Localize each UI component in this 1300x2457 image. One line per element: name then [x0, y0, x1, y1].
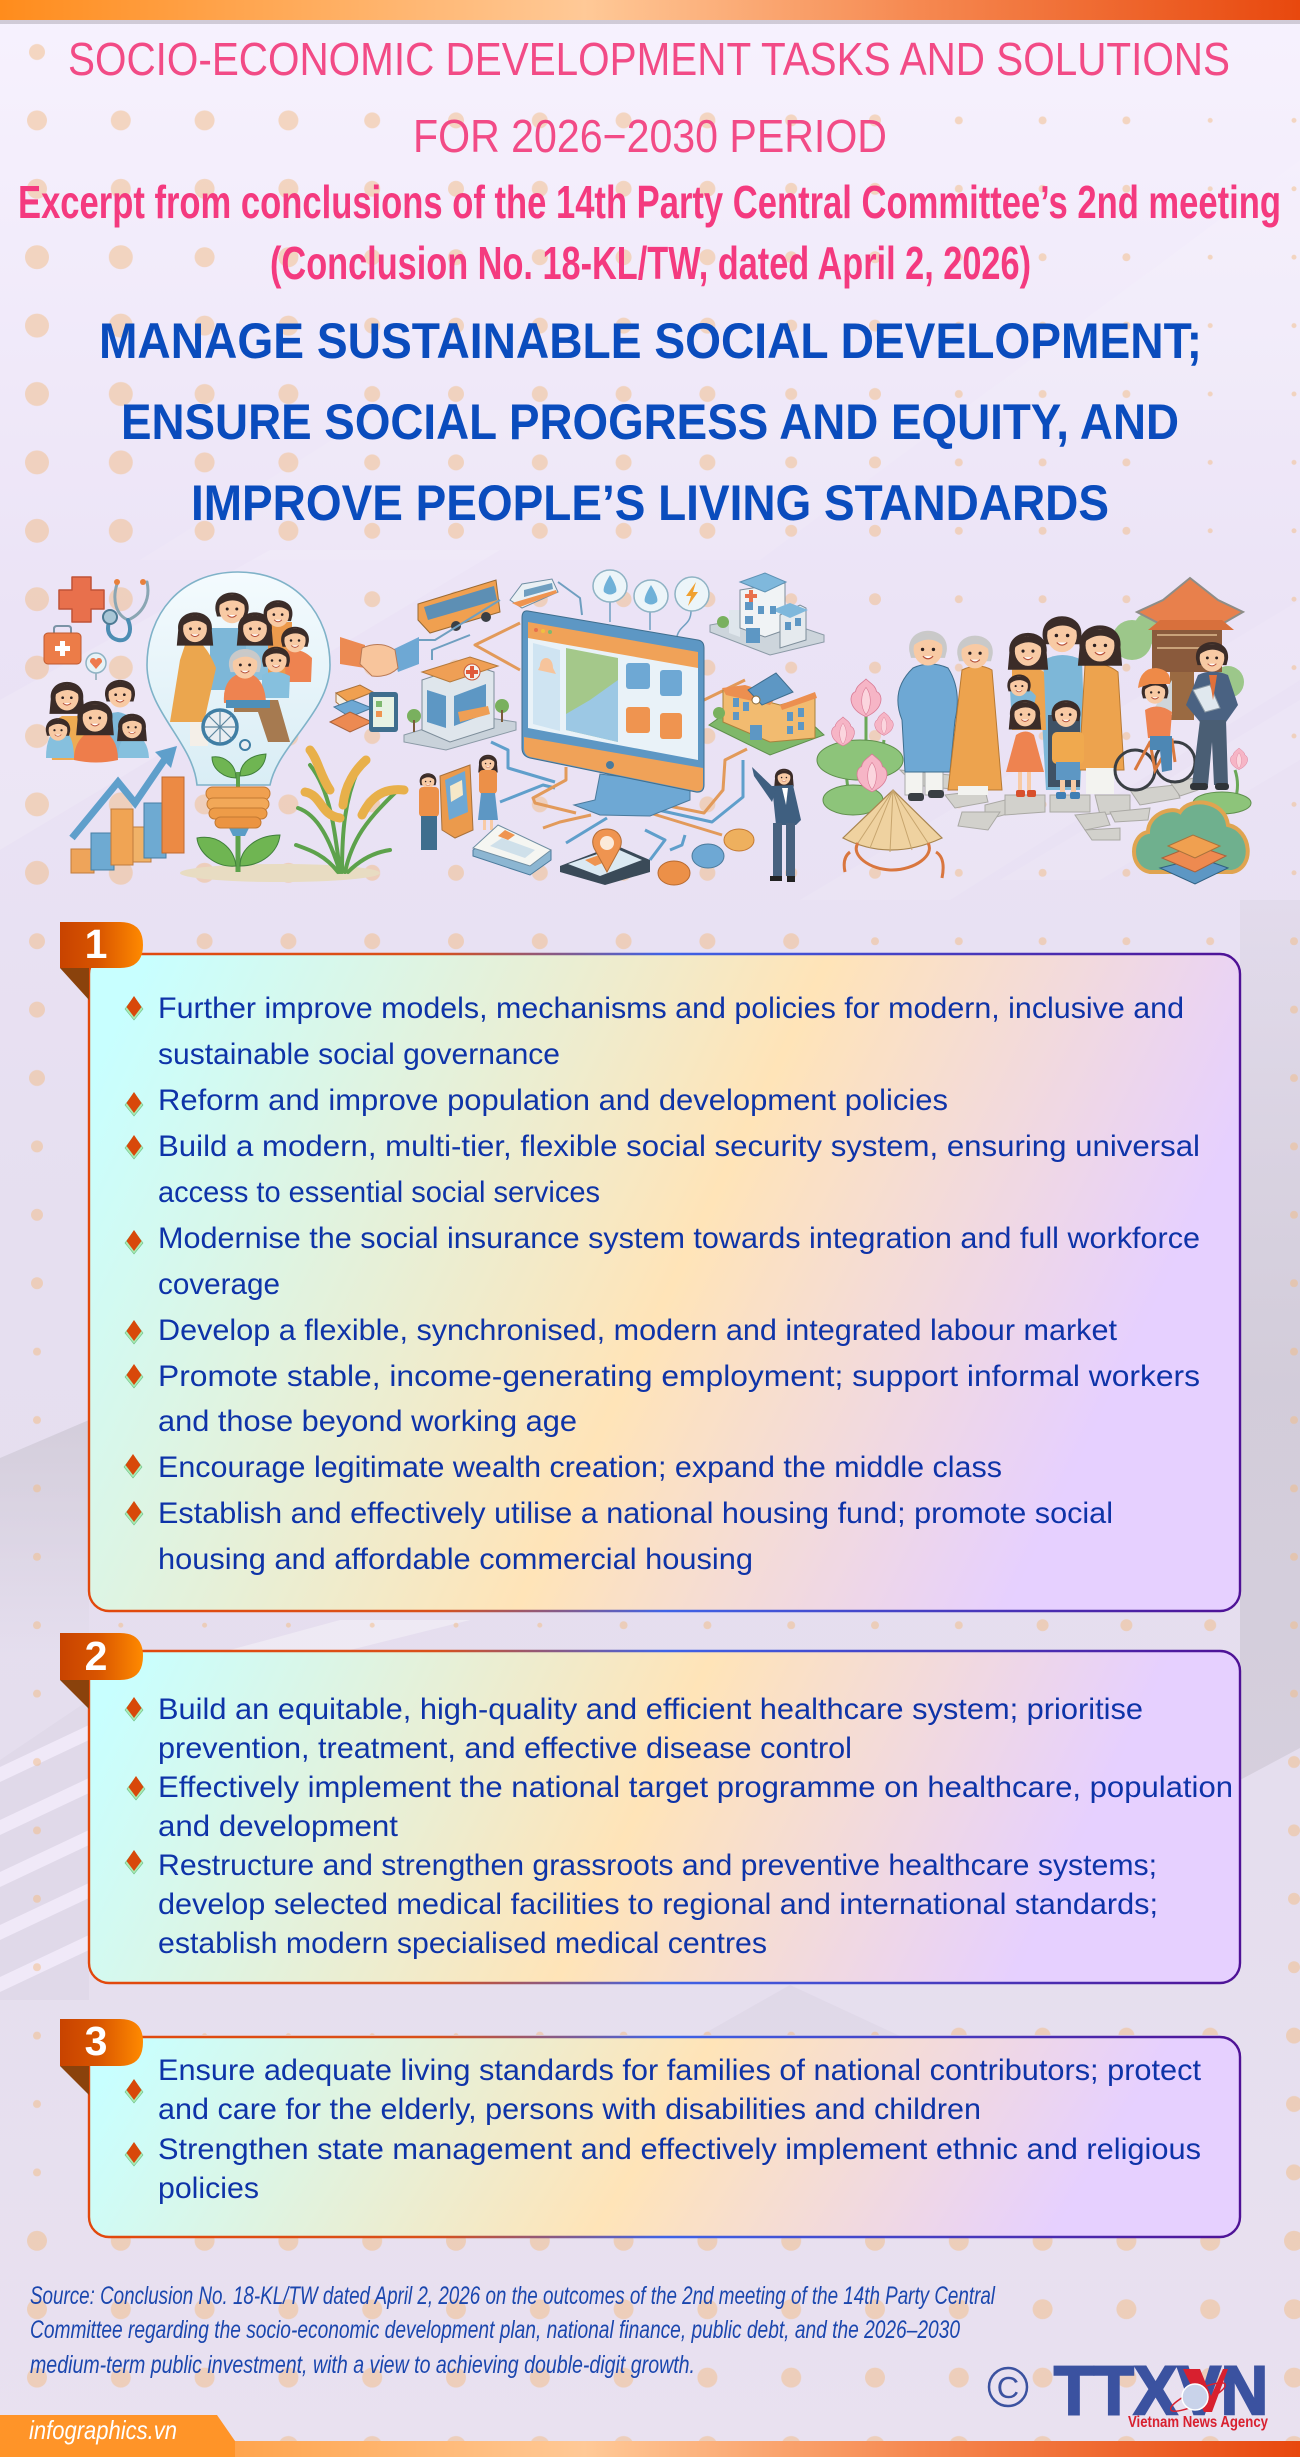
heading in blue: IMPROVE PEOPLE’S LIVING STANDARDS	[191, 475, 1109, 531]
left family group	[46, 680, 149, 762]
text: list items: policies	[158, 2172, 259, 2205]
text: list items: access to essential social services	[158, 1176, 600, 1209]
icon: medical case	[44, 626, 81, 664]
icons: utility bubbles	[593, 570, 709, 636]
text: list items: prevention, treatment, and effective disease control	[158, 1732, 852, 1765]
source note	[30, 2282, 996, 2379]
bus	[418, 580, 500, 633]
woman presenter	[752, 767, 801, 882]
grandfather in blue ao dai	[898, 631, 957, 801]
footer tab: infographics.vn: infographics.vn	[29, 2415, 177, 2445]
logo: TTXVN Vietnam News Agency: Vietnam News Agency	[1128, 2414, 1268, 2431]
illustration: social development scene	[44, 570, 1251, 885]
text: list items: Ensure adequate living standards for families of national contributors; protect	[158, 2054, 1202, 2087]
badge 2: 2	[85, 1633, 107, 1679]
icon: red cross	[59, 577, 104, 622]
text: list items: and development	[158, 1810, 399, 1843]
hospital building	[404, 657, 516, 750]
title: main title in pink	[68, 33, 1230, 162]
subtitle: excerpt line	[18, 176, 1281, 289]
footer tab: infographics.vn	[0, 2415, 235, 2457]
coins	[658, 829, 754, 885]
source note: medium-term public investment, with a view to achieving double-digit growth.	[30, 2351, 695, 2379]
bullet markers	[125, 1697, 145, 1874]
text: list items: Develop a flexible, synchronised, modern and integrated labour market	[158, 1314, 1118, 1347]
badge 3	[60, 2018, 143, 2095]
text: list items: Modernise the social insurance system towards integration and full workforce	[158, 1222, 1200, 1255]
right lotus bud and leaf	[1193, 748, 1251, 814]
family: parents	[1007, 616, 1124, 794]
handshake	[340, 637, 419, 676]
rice plant	[296, 750, 404, 872]
girl and boy holding hands	[1006, 700, 1084, 799]
subtitle: excerpt line: (Conclusion No. 18-KL/TW, dated April 2, 2026)	[270, 237, 1031, 289]
panel 3: living standards and state management	[60, 2018, 1240, 2237]
text: list items: develop selected medical facilities to regional and international standards;	[158, 1888, 1158, 1921]
document stack	[473, 825, 551, 875]
bottom gradient bar	[0, 2441, 1300, 2457]
text: list items: Establish and effectively utilise a national housing fund; promote social	[158, 1497, 1113, 1530]
title: main title in pink: FOR 2026−2030 PERIOD	[413, 110, 887, 162]
badge 1: 1	[85, 921, 107, 967]
text: list items: Promote stable, income-generating employment; support informal workers	[158, 1360, 1200, 1393]
conical hat with ribbon	[843, 790, 943, 878]
text: list items	[158, 1693, 1233, 1960]
logo: TTXVN Vietnam News Agency: C	[997, 2370, 1019, 2405]
heading in blue: MANAGE SUSTAINABLE SOCIAL DEVELOPMENT;	[99, 313, 1202, 369]
circuit lines	[419, 582, 747, 860]
icon: stethoscope	[103, 579, 148, 640]
plant under the bulb on soil	[180, 835, 380, 882]
bullet markers	[125, 2079, 143, 2166]
text: list items: Further improve models, mechanisms and policies for modern, inclusive and	[158, 992, 1184, 1025]
text: list items: and those beyond working age	[158, 1405, 577, 1438]
cloud with books	[1134, 802, 1248, 884]
text: list items: Encourage legitimate wealth creation; expand the middle class	[158, 1451, 1002, 1484]
bar chart with rising arrow	[71, 746, 184, 873]
badge 2	[60, 1633, 143, 1709]
monitor with e-government screen	[522, 611, 704, 816]
pagoda and tree	[1112, 578, 1244, 720]
bullet markers	[124, 996, 143, 1525]
heading in blue: ENSURE SOCIAL PROGRESS AND EQUITY, AND	[121, 394, 1179, 450]
text: list items: Effectively implement the national target programme on healthcare, population	[158, 1771, 1233, 1804]
man in suit with clipboard	[1186, 642, 1238, 790]
sprout inside bulb	[212, 754, 266, 790]
bulb base	[206, 787, 270, 836]
stepping stone path	[900, 770, 1198, 840]
tablet with location pin	[560, 829, 650, 885]
text: list items: Reform and improve population and development policies	[158, 1084, 948, 1117]
books and tablet	[330, 685, 398, 732]
badge 1	[60, 921, 143, 1000]
school building	[709, 673, 824, 755]
people at service kiosk	[419, 755, 498, 850]
source note: Source: Conclusion No. 18-KL/TW dated April 2, 2026 on the outcomes of the 2nd meeting of the 14th Party Central	[30, 2282, 996, 2310]
icon: heart bubble	[86, 653, 106, 680]
text: list items: sustainable social governance	[158, 1038, 560, 1071]
lotus plant	[817, 679, 903, 815]
source note: Committee regarding the socio-economic development plan, national finance, public debt, and the 2026–2030	[30, 2316, 960, 2344]
text: list items: coverage	[158, 1268, 280, 1301]
grandmother in orange ao dai	[948, 636, 1002, 795]
badge 3: 3	[85, 2018, 107, 2064]
text: list items: Strengthen state management and effectively implement ethnic and religious	[158, 2133, 1201, 2166]
light bulb with family inside	[147, 572, 330, 836]
family inside bulb	[170, 592, 312, 750]
panel 2: healthcare	[60, 1633, 1240, 1983]
panel 1: social governance and welfare	[60, 921, 1240, 1611]
text: list items: and care for the elderly, persons with disabilities and children	[158, 2093, 981, 2126]
text: list items: Build an equitable, high-quality and efficient healthcare system; prioritise	[158, 1693, 1143, 1726]
text: list items: establish modern specialised medical centres	[158, 1927, 767, 1960]
logo: TTXVN Vietnam News Agency: TTXVN	[1054, 2352, 1268, 2429]
text: list items	[158, 992, 1200, 1576]
text: list items	[158, 2054, 1202, 2205]
text: list items: Build a modern, multi-tier, flexible social security system, ensuring universal	[158, 1130, 1200, 1163]
text: list items: Restructure and strengthen grassroots and preventive healthcare systems;	[158, 1849, 1157, 1882]
train	[510, 579, 558, 608]
hospital building right	[710, 573, 824, 655]
heading in blue	[99, 313, 1202, 531]
top gradient bar	[0, 0, 1300, 24]
text: list items: housing and affordable commercial housing	[158, 1543, 753, 1576]
child on bicycle	[1115, 668, 1195, 790]
